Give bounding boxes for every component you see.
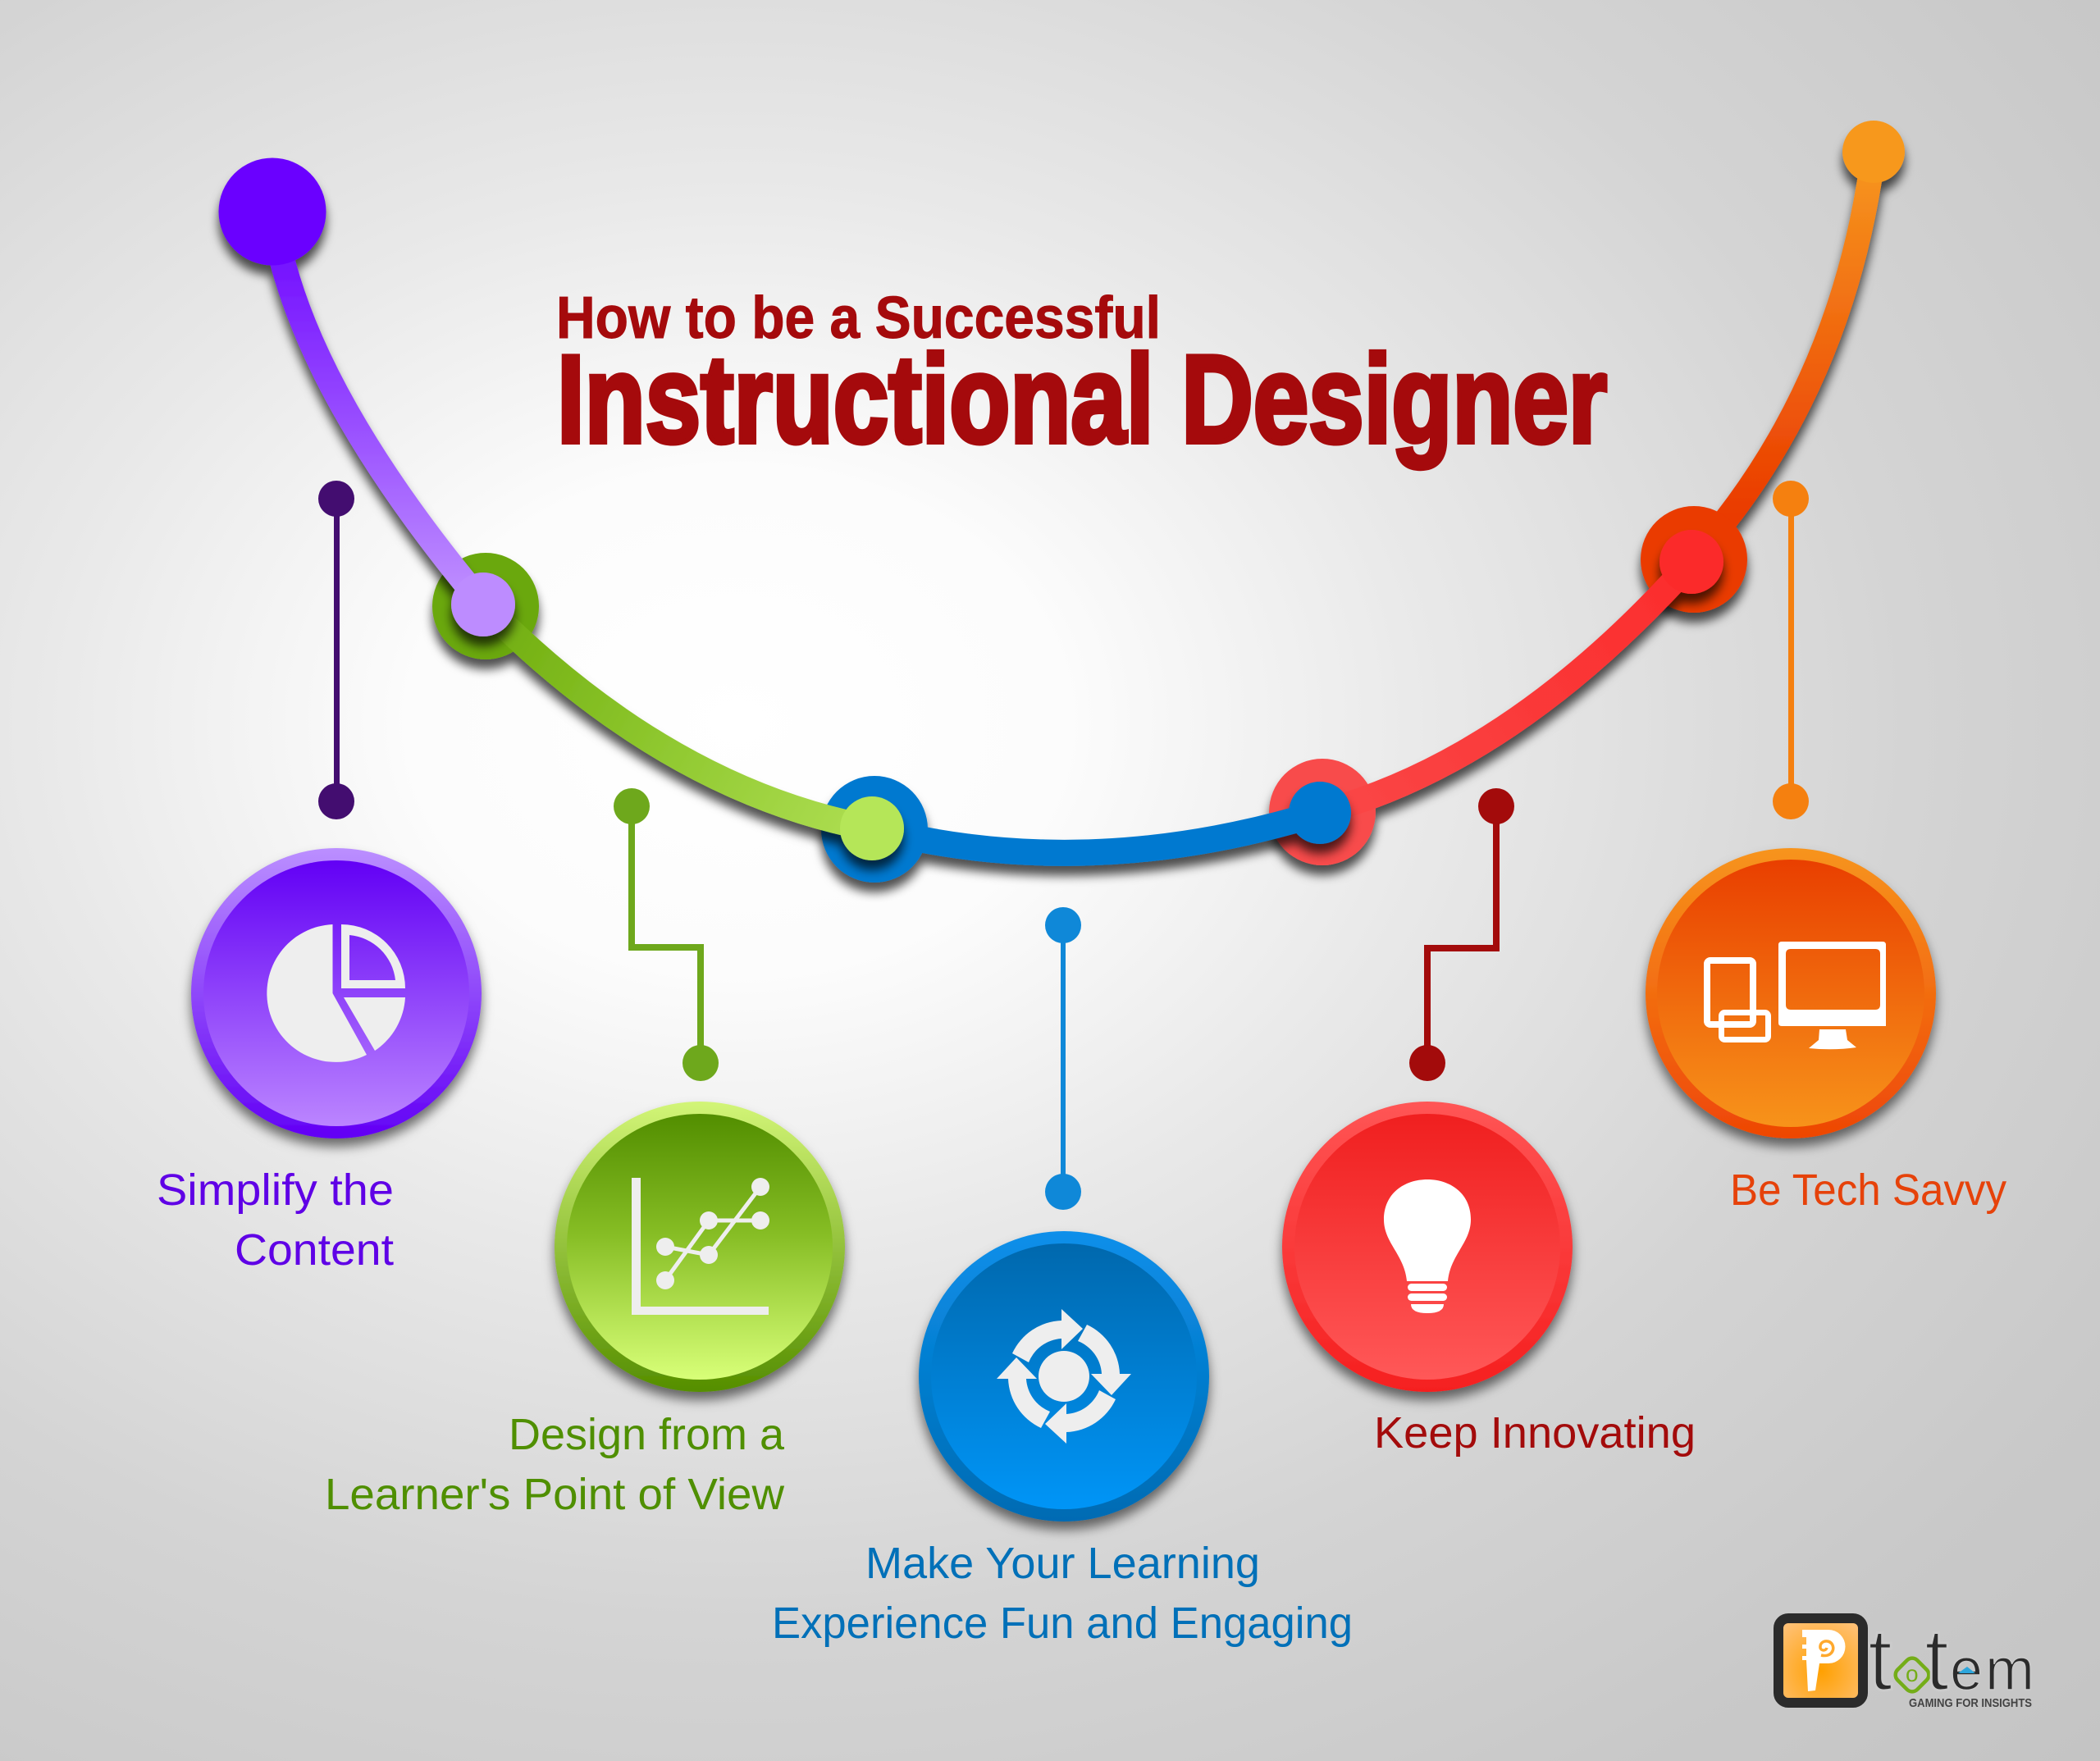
label: simplify the content: Content (235, 1225, 394, 1275)
logo mark (1778, 1618, 1863, 1703)
logo: totem (1778, 1609, 2034, 1710)
badge: simplify the content (191, 848, 482, 1138)
icon: devices (1707, 942, 1886, 1049)
connector: purple (318, 481, 354, 819)
icon: blue triangle (1958, 1667, 1975, 1673)
curve segment: blue (821, 776, 1351, 883)
title (556, 285, 1607, 469)
label: simplify the content: Simplify the (157, 1166, 394, 1215)
logo tagline: GAMING FOR INSIGHTS (1909, 1696, 2032, 1710)
label: design from a learner's point of view: Learner's Point of View (325, 1470, 785, 1519)
title line 2: Instructional Designer (557, 330, 1607, 469)
label: simplify the content (157, 1166, 394, 1275)
curve segment: purple (218, 157, 515, 636)
label: keep innovating: Keep Innovating (1374, 1408, 1696, 1458)
badge: keep innovating (1282, 1102, 1573, 1392)
label: design from a learner's point of view (325, 1410, 785, 1519)
connector: green (614, 788, 719, 1081)
icon: pie chart (267, 924, 405, 1062)
title line 1: How to be a Successful (556, 285, 1161, 351)
label: make your learning experience fun and engaging: Make Your Learning (865, 1539, 1260, 1588)
icon: line chart (632, 1178, 769, 1315)
icon: light bulb (1384, 1179, 1471, 1313)
badge: make your learning experience fun (919, 1231, 1209, 1521)
label: design from a learner's point of view: Design from a (509, 1410, 785, 1459)
curve segment: orange (1641, 121, 1905, 613)
connector: red (1409, 788, 1514, 1081)
curve segment: red (1269, 530, 1723, 865)
connector: blue (1045, 907, 1081, 1210)
curved path (218, 121, 1905, 883)
logo wordmark: e (1950, 1637, 1983, 1703)
logo wordmark: t (1924, 1609, 1949, 1709)
badge: be tech savvy (1646, 848, 1936, 1138)
label: make your learning experience fun and engaging (772, 1539, 1353, 1648)
badge: design from a learner's point of view (555, 1102, 845, 1392)
logo wordmark: o (1906, 1661, 1919, 1686)
logo wordmark: t (1868, 1609, 1892, 1709)
curve segment: green (432, 553, 904, 860)
connector: orange (1773, 481, 1809, 819)
label: be tech savvy: Be Tech Savvy (1730, 1166, 2006, 1215)
logo wordmark: m (1985, 1637, 2034, 1703)
icon: cycle arrows (997, 1309, 1131, 1444)
icon: green diamond (1892, 1655, 1932, 1695)
label: make your learning experience fun and engaging: Experience Fun and Engaging (772, 1599, 1353, 1648)
